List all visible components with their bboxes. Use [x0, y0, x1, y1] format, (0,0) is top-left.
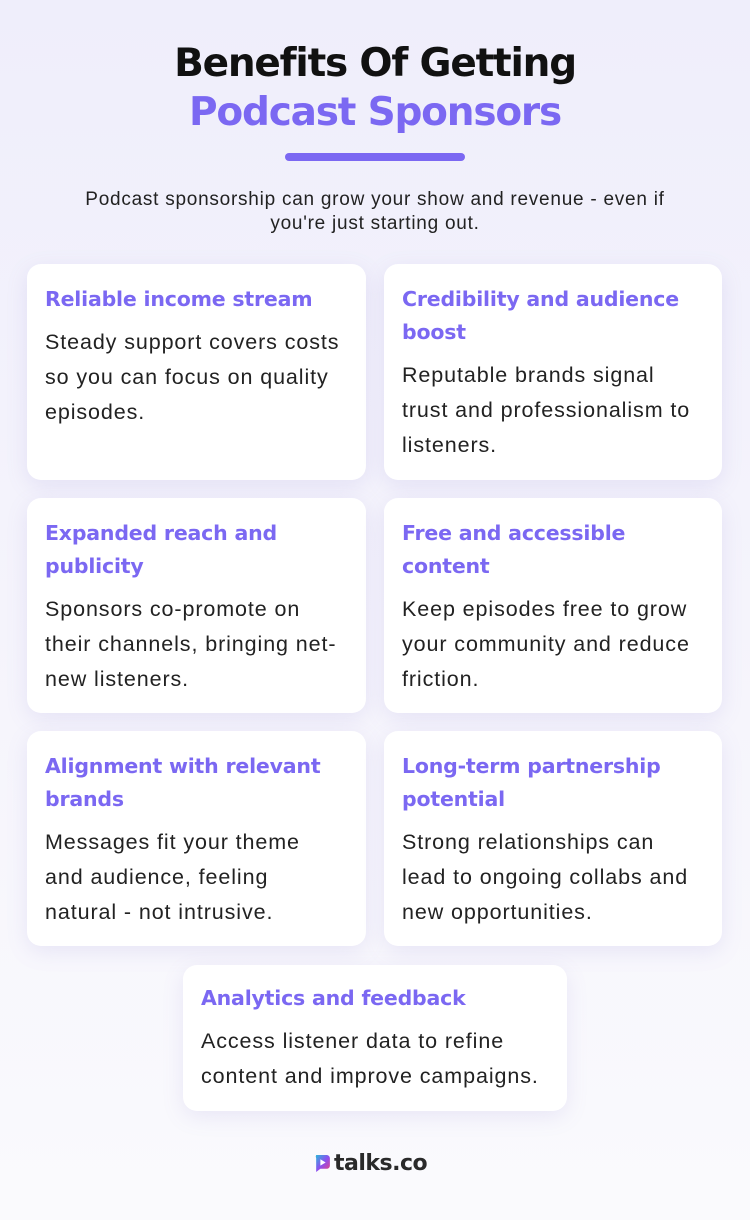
card: reliable income: Steady support covers costs: [45, 330, 339, 354]
card: expanded reach: Sponsors co-promote on: [45, 597, 300, 621]
card: analytics: [183, 965, 567, 1111]
card: free content: content: [402, 554, 490, 578]
card: alignment: natural - not intrusive.: [45, 900, 273, 924]
card: analytics: Access listener data to refine: [201, 1029, 504, 1053]
card: credibility: trust and professionalism to: [402, 398, 690, 422]
title: Benefits Of Getting: [174, 41, 576, 86]
card: reliable income: [27, 264, 366, 480]
underline bar: [285, 153, 465, 161]
card: credibility: [384, 264, 722, 480]
card: long-term: potential: [402, 787, 505, 811]
card: long-term: [384, 731, 722, 946]
card: alignment: Messages fit your theme: [45, 830, 300, 854]
card: credibility: boost: [402, 320, 466, 344]
card: credibility: listeners.: [402, 433, 497, 457]
card: analytics: content and improve campaigns.: [201, 1064, 539, 1088]
card: reliable income: so you can focus on quality: [45, 365, 329, 389]
card: long-term: Strong relationships can: [402, 830, 654, 854]
card: free content: Keep episodes free to grow: [402, 597, 687, 621]
card: free content: your community and reduce: [402, 632, 690, 656]
card: expanded reach: their channels, bringing net-: [45, 632, 336, 656]
card: long-term: Long-term partnership: [402, 754, 661, 778]
card: alignment: [27, 731, 366, 946]
card: credibility: Credibility and audience: [402, 287, 679, 311]
icon: logo mark: [316, 1155, 330, 1172]
subtitle: [85, 189, 665, 234]
card: reliable income: episodes.: [45, 400, 145, 424]
card: free content: Free and accessible: [402, 521, 625, 545]
card: expanded reach: Expanded reach and: [45, 521, 277, 545]
card: free content: [384, 498, 722, 713]
card: expanded reach: [27, 498, 366, 713]
subtitle: Podcast sponsorship can grow your show and revenue - even if: [85, 189, 665, 210]
subtitle: you're just starting out.: [270, 213, 480, 234]
card: credibility: Reputable brands signal: [402, 363, 655, 387]
card: alignment: brands: [45, 787, 124, 811]
card: alignment: and audience, feeling: [45, 865, 268, 889]
logo: talks.co: [334, 1150, 427, 1176]
card: alignment: Alignment with relevant: [45, 754, 320, 778]
card: analytics: Analytics and feedback: [201, 986, 466, 1010]
card: long-term: new opportunities.: [402, 900, 593, 924]
card: free content: friction.: [402, 667, 479, 691]
title highlight: Podcast Sponsors: [189, 90, 561, 135]
card: reliable income: Reliable income stream: [45, 287, 312, 311]
card: expanded reach: new listeners.: [45, 667, 189, 691]
card: expanded reach: publicity: [45, 554, 144, 578]
card: long-term: lead to ongoing collabs and: [402, 865, 688, 889]
